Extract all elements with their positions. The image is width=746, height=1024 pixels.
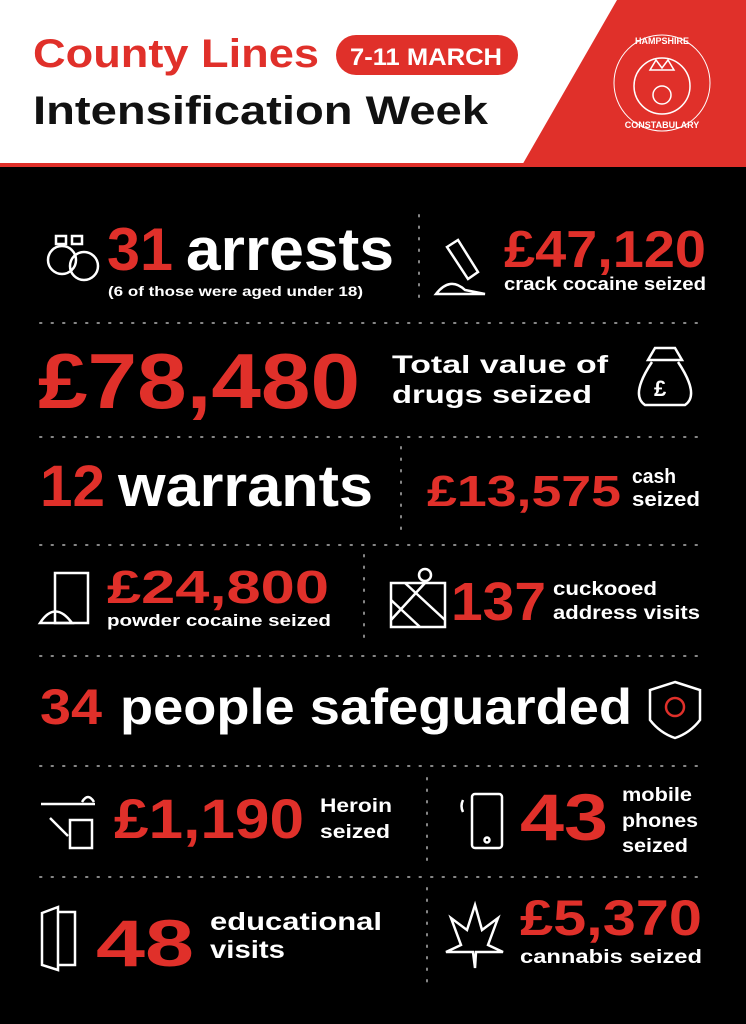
title: Intensification Week bbox=[33, 89, 489, 133]
stat: 31 arrests: arrests bbox=[186, 216, 394, 283]
date badge: 7-11 MARCH bbox=[350, 44, 502, 71]
stat: 12 warrants: warrants bbox=[117, 454, 373, 519]
stat: 48 educational visits: educational bbox=[210, 908, 382, 936]
stat: 78,480 total: drugs seized bbox=[392, 381, 592, 409]
stat: 137 cuckooed: address visits bbox=[553, 603, 700, 624]
header: white band bbox=[0, 0, 746, 167]
stat: 137 cuckooed bbox=[391, 569, 700, 632]
stat: 1,190 heroin: £1,190 bbox=[114, 787, 304, 850]
stat: 13,575 cash: £13,575 bbox=[427, 467, 621, 516]
stat: 48 educational visits: visits bbox=[210, 936, 285, 964]
stat: 43 mobile phones: 43 bbox=[520, 780, 608, 854]
icon: money bag bbox=[639, 348, 691, 405]
title bbox=[33, 32, 489, 133]
icon: door bbox=[42, 907, 75, 970]
stat: 78,480 total: Total value of bbox=[392, 351, 609, 379]
stat: 137 cuckooed: 137 bbox=[451, 572, 546, 632]
icon: spoon & lighter bbox=[41, 797, 95, 848]
stat: 78,480 total bbox=[38, 337, 691, 425]
logo: Hampshire Constabulary: CONSTABULARY bbox=[625, 120, 699, 130]
stat: 47,120 crack cocaine bbox=[436, 221, 706, 294]
stat: 13,575 cash: cash bbox=[632, 466, 676, 488]
stat: 31 arrests: (6 of those were aged under 18) bbox=[108, 283, 363, 299]
logo: Hampshire Constabulary: HAMPSHIRE bbox=[635, 36, 689, 46]
stat: 34 people safeguarded: 34 bbox=[40, 679, 102, 735]
stat: 43 mobile phones: mobile bbox=[622, 785, 692, 806]
icon: handcuffs bbox=[48, 236, 98, 280]
stat: 12 warrants: 12 bbox=[40, 454, 105, 519]
icon: crack bbox=[436, 240, 485, 294]
icon: money bag: £ bbox=[654, 376, 667, 401]
stat: 5,370 cannabis: cannabis seized bbox=[520, 947, 702, 968]
dividers bbox=[40, 215, 702, 985]
stat: 31 arrests: 31 bbox=[107, 216, 173, 283]
stat: 13,575 cash: seized bbox=[632, 489, 700, 511]
stat: 47,120 crack cocaine: £47,120 bbox=[504, 221, 706, 279]
stat: 31 arrests bbox=[48, 216, 394, 299]
stat: 5,370 cannabis: £5,370 bbox=[520, 890, 702, 946]
stat: 43 mobile phones: seized bbox=[622, 836, 688, 857]
title: County Lines bbox=[33, 32, 319, 76]
stat: 48 educational visits bbox=[42, 906, 382, 980]
icon: phone bbox=[462, 794, 502, 848]
stat: 43 mobile phones: phones bbox=[622, 811, 698, 832]
stat: 24,800 powder cocaine bbox=[40, 561, 331, 630]
stat: 43 mobile phones bbox=[462, 780, 698, 857]
stat: 1,190 heroin: seized bbox=[320, 822, 390, 843]
stat: 34 people safeguarded: people safeguarded bbox=[120, 679, 632, 735]
icon: powder bag bbox=[40, 573, 88, 623]
stat: 34 people safeguarded bbox=[40, 679, 700, 738]
stat: 5,370 cannabis bbox=[446, 890, 702, 968]
icon: cannabis leaf bbox=[446, 905, 503, 968]
stat: 24,800 powder cocaine: powder cocaine seized bbox=[107, 611, 331, 630]
stat: 78,480 total: £78,480 bbox=[38, 337, 360, 425]
stat: 13,575 cash bbox=[427, 466, 700, 516]
stat: 137 cuckooed: cuckooed bbox=[553, 579, 657, 600]
stat: 47,120 crack cocaine: crack cocaine seized bbox=[504, 274, 706, 294]
stat: 24,800 powder cocaine: £24,800 bbox=[107, 561, 329, 613]
icon: map bbox=[391, 569, 445, 627]
logo: Hampshire Constabulary bbox=[614, 35, 710, 131]
stat: 1,190 heroin bbox=[41, 787, 392, 850]
stat: 48 educational visits: 48 bbox=[96, 906, 194, 980]
icon: shield bbox=[650, 682, 700, 738]
stat: 1,190 heroin: Heroin bbox=[320, 796, 392, 817]
date badge bbox=[336, 35, 518, 75]
